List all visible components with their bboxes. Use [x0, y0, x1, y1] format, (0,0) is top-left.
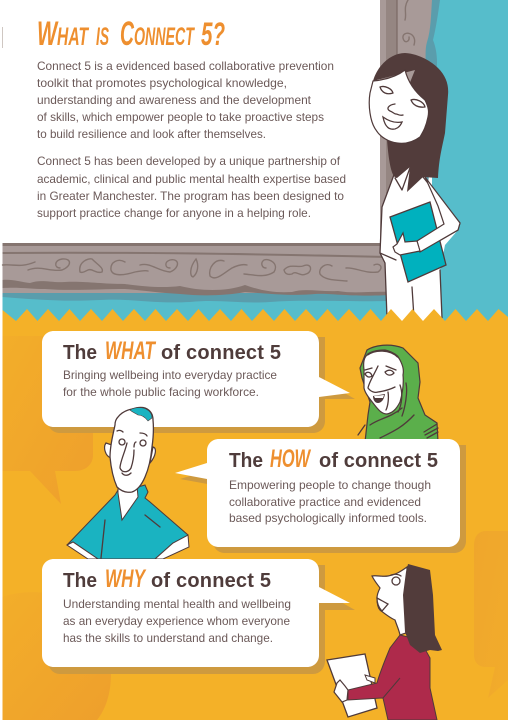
mouth — [383, 117, 402, 129]
speech bubble: how — [175, 439, 466, 553]
title — [37, 15, 225, 53]
heading: why: The — [63, 570, 97, 592]
arm and hand — [417, 177, 460, 252]
character: woman in red — [327, 564, 442, 720]
hair — [403, 564, 442, 653]
left page mark — [2, 27, 3, 48]
heading: why — [63, 565, 271, 593]
frame ornament swirls — [2, 0, 415, 281]
title: WHAT — [37, 15, 90, 53]
body text: why: Understanding mental health and wellbeing — [63, 597, 291, 611]
body text: what: Bringing wellbeing into everyday practice — [63, 368, 277, 382]
heading: why: WHY — [105, 565, 147, 593]
intro paragraph 1: Connect 5 is a evidenced based collaborative prevention — [37, 59, 334, 73]
picture frame — [2, 0, 440, 302]
body text: what: for the whole public facing workforce. — [63, 385, 259, 399]
sweater — [348, 635, 437, 720]
background speech shape: left — [2, 336, 93, 504]
title: CONNECT — [120, 15, 196, 53]
scarf fringe — [424, 424, 438, 438]
intro paragraph 2: academic, clinical and public mental health expertise based — [37, 172, 346, 186]
background speech shape: right — [474, 531, 508, 698]
heading: how: HOW — [270, 445, 312, 473]
heading: what: The — [63, 342, 97, 364]
intro paragraph 1: understanding and awareness and the development — [37, 93, 312, 107]
body text: how: collaborative practice and evidenced — [229, 495, 421, 509]
body text: why: has the skills to understand and change. — [63, 631, 273, 645]
body text: what — [63, 368, 277, 399]
heading: how — [229, 445, 438, 473]
character: woman with book — [369, 53, 460, 322]
body text: how: Empowering people to change though — [229, 478, 431, 492]
arms — [67, 535, 189, 559]
intro paragraph 2 — [37, 154, 346, 220]
intro paragraph 1 — [37, 59, 334, 141]
intro paragraph 2: in Greater Manchester. The program has been designed to — [37, 189, 344, 203]
intro paragraph 2: support practice change for anyone in a helping role. — [37, 206, 311, 220]
intro paragraph 1: to build resilience and look after themselves. — [37, 127, 266, 141]
hands — [334, 680, 348, 702]
character: man in teal shirt — [67, 407, 189, 559]
speech bubble: why — [42, 559, 355, 674]
title: 5? — [201, 16, 225, 52]
teal background — [2, 0, 508, 322]
bottom orange panel with zigzag top — [2, 309, 508, 720]
paper — [327, 654, 377, 717]
intro paragraph 2: Connect 5 has been developed by a unique partnership of — [37, 154, 341, 168]
body text: why — [63, 597, 291, 645]
head — [110, 407, 153, 492]
heading: what — [63, 337, 281, 365]
shirt — [67, 485, 188, 559]
hair — [373, 53, 448, 192]
heading: how: The — [229, 450, 263, 472]
book — [390, 202, 446, 282]
heading: what: of connect 5 — [161, 342, 281, 364]
neck — [118, 485, 138, 520]
hair — [130, 408, 152, 421]
body text: how — [229, 478, 431, 525]
ears — [105, 443, 155, 463]
background circle: bottom left — [2, 592, 111, 720]
character: woman in green headscarf — [358, 345, 438, 442]
body text: why: as an everyday experience whom everyone — [63, 614, 290, 628]
intro paragraph 1: of skills, which empower people to take proactive steps — [37, 110, 324, 124]
face — [372, 567, 407, 635]
heading: how: of connect 5 — [319, 450, 438, 472]
speech bubble: what — [42, 331, 355, 433]
title: IS — [96, 23, 109, 51]
intro paragraph 1: toolkit that promotes psychological knowledge, — [37, 76, 287, 90]
face — [369, 70, 429, 143]
body text: how: based psychologically informed tools. — [229, 511, 427, 525]
heading: why: of connect 5 — [151, 570, 271, 592]
heading: what: WHAT — [105, 337, 157, 365]
